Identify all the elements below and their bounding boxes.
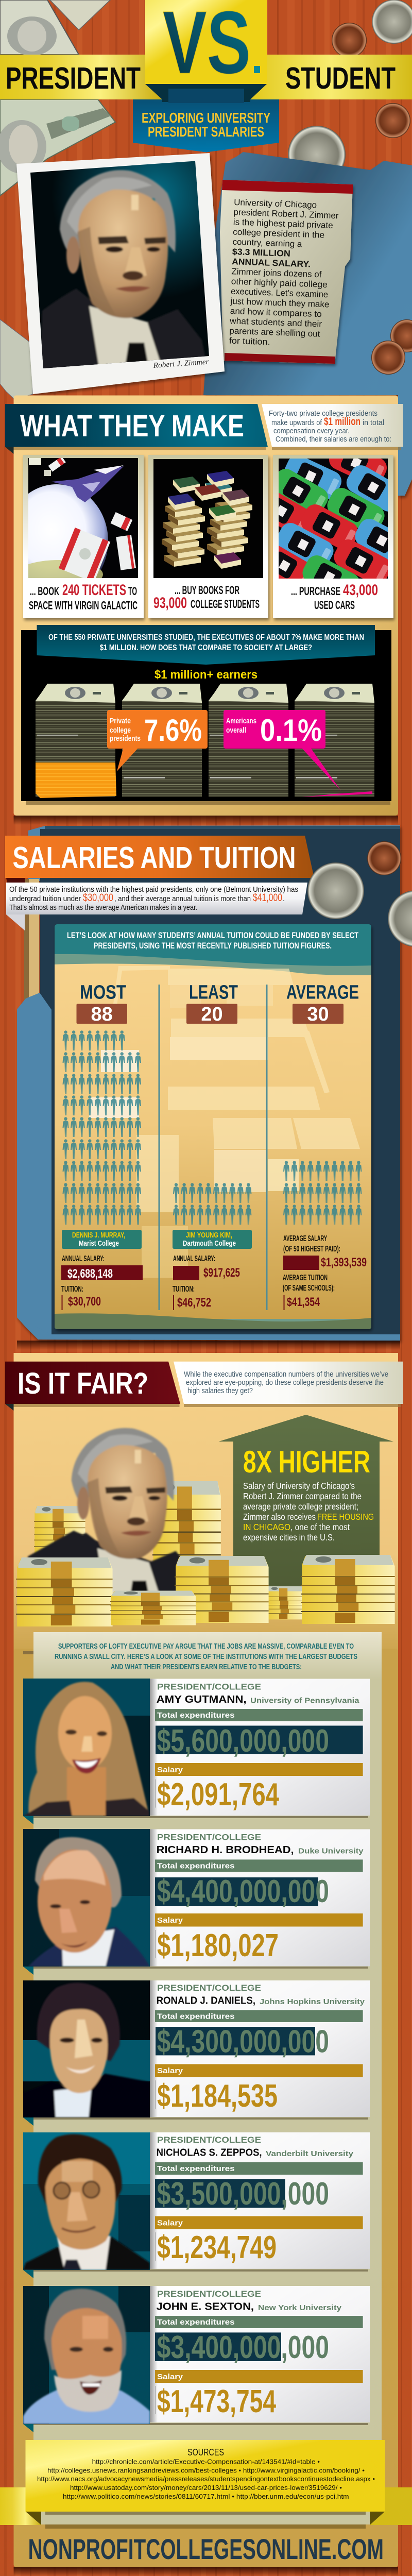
column: average: 30 <box>307 1004 329 1025</box>
bar chart: salary: $1,473,754 <box>157 2384 276 2419</box>
text block: Daniels details: RONALD J. DANIELS, <box>157 1995 255 2006</box>
text block: caption cars <box>291 582 378 612</box>
card: Amy Gutmann <box>23 1679 370 1824</box>
panel: million earners chart <box>21 625 391 805</box>
panel: sources: http://www.nacs.org/advocacynewsmedia/pressreleases/studentspendingontextbookscontinuestodecline.aspx • <box>37 2476 375 2483</box>
text block: caption books: 93,000 <box>153 595 187 612</box>
text block: Daniels details: Johns Hopkins University <box>260 1997 365 2006</box>
text block: Zeppos details: PRESIDENT/COLLEGE <box>157 2135 261 2145</box>
heading: is it fair: IS IT FAIR? <box>18 1367 148 1400</box>
bar chart: total expenditures <box>155 1709 363 1759</box>
icon: rows of used cars <box>279 459 388 579</box>
text block: caption books: COLLEGE STUDENTS <box>191 598 260 611</box>
text block: salaries intro: undergrad tuition under <box>9 894 81 903</box>
heading: is it fair <box>5 1362 180 1411</box>
pictogram: 30 students <box>283 1161 362 1225</box>
divider: column rule one <box>159 985 160 1310</box>
portrait: Zimmer with money <box>28 1428 203 1611</box>
bar chart: total expenditures <box>155 2162 363 2212</box>
callout: americans overall: overall <box>226 726 246 735</box>
bar chart: total expenditures: $4,400,000,000 <box>157 1874 329 1909</box>
text block: forty-two presidents: make upwards of <box>271 418 322 427</box>
text block: intro paragraph: is the highest paid private <box>233 217 333 230</box>
icon: penny right <box>375 103 410 138</box>
text block: forty-two presidents: compensation every year. <box>273 427 350 435</box>
panel: polaroid photo of Robert J. Zimmer: Robert J. Zimmer <box>152 358 209 370</box>
banner: how does that compare <box>37 625 375 665</box>
heading: exploring university president salaries: EXPLORING UNIVERSITY <box>142 110 270 126</box>
icon: penny lower right <box>390 319 412 352</box>
label: Jim Young Kim <box>173 1230 252 1249</box>
heading: salaries and tuition: SALARIES AND TUITION <box>12 841 296 875</box>
column: least: 20 <box>201 1004 223 1025</box>
text block: caption tickets <box>29 582 138 612</box>
text block: supporters argue <box>55 1642 357 1671</box>
icon: spaceship and tickets above planet <box>28 458 138 578</box>
icon: dollar bills lower left <box>0 319 33 399</box>
icon: half dollar by intro <box>307 862 364 919</box>
bar chart: total expenditures <box>155 2316 363 2365</box>
ribbon: sources banner ends <box>0 2487 412 2529</box>
panel: sources: http://www.usatoday.com/story/money/cars/2013/11/13/used-car-prices-lower/3519629/ • <box>70 2484 342 2492</box>
bar chart: total expenditures: $3,400,000,000 <box>157 2330 329 2365</box>
stat: annual salary: $917,625 <box>203 1266 240 1280</box>
icon: half dollar coin middle <box>288 126 346 183</box>
stat: annual salary: ANNUAL SALARY: <box>62 1255 105 1263</box>
portrait: Richard H. Brodhead <box>23 1829 150 1967</box>
text block: let's look at: PRESIDENTS, USING THE MOST RECENTLY PUBLISHED TUITION FIGURES. <box>94 941 332 951</box>
text block: intro paragraph: parents are shelling out <box>229 326 320 339</box>
callout: private college presidents <box>107 710 208 771</box>
text block: caption tickets: TO <box>128 585 137 598</box>
text block: Sexton details: JOHN E. SEXTON, <box>157 2301 254 2312</box>
bar chart: salary: Salary <box>157 2372 183 2381</box>
stat: tuition: $46,752 <box>177 1296 211 1310</box>
bar chart: total expenditures: Total expenditures <box>157 2012 235 2021</box>
stat: annual salary: ANNUAL SALARY: <box>173 1255 215 1263</box>
icon: pile of dollar bills, top left <box>0 0 110 56</box>
pictogram: 88 students <box>63 1030 141 1225</box>
stat: annual salary <box>61 1255 143 1281</box>
text block: Brodhead details: Duke University <box>298 1846 364 1856</box>
icon: pile of dollar bills under ribbon <box>0 99 115 196</box>
stat: average tuition: (OF SAME SCHOOLS): <box>283 1284 335 1293</box>
panel: what they make <box>13 396 398 825</box>
text block: Zimmer comparison <box>243 1481 374 1543</box>
panel: card tickets to space <box>5 455 144 618</box>
bar chart: salary <box>155 1913 363 1963</box>
callout: private college presidents: presidents <box>110 734 141 743</box>
stat: average tuition: $41,354 <box>287 1295 320 1309</box>
text block: forty-two presidents: in total <box>363 418 384 427</box>
stat: annual salary: $2,688,148 <box>67 1267 113 1281</box>
card: John E. Sexton <box>23 2286 370 2432</box>
text block: do they deserve it: explored are eye-popping, do these college presidents deserve the <box>186 1378 384 1387</box>
stat: average salary: AVERAGE SALARY <box>283 1234 327 1243</box>
panel: sources: http://chronicle.com/article/Executive-Compensation-at/143541/#id=table • <box>92 2459 320 2466</box>
panel: card used cars <box>272 455 397 622</box>
column: average: AVERAGE <box>286 982 359 1004</box>
bar chart: total expenditures: Total expenditures <box>157 1711 235 1720</box>
stat: tuition: TUITION: <box>61 1285 83 1294</box>
bar chart: salary: Salary <box>157 1766 183 1774</box>
text block: Sexton details: New York University <box>258 2303 342 2312</box>
text block: salaries intro: $41,000 <box>253 892 282 904</box>
bar chart: salary: Salary <box>157 1916 183 1925</box>
text block: Gutmann details: PRESIDENT/COLLEGE <box>157 1682 261 1692</box>
text block: Sexton details: PRESIDENT/COLLEGE <box>157 2289 261 2299</box>
text block: Brodhead details: RICHARD H. BRODHEAD, <box>157 1844 294 1856</box>
text block: intro paragraph: University of Chicago <box>234 197 317 210</box>
card: Ronald J. Daniels <box>23 1980 370 2126</box>
bar chart: total expenditures <box>155 1859 363 1909</box>
bar chart: total expenditures: $3,500,000,000 <box>157 2176 329 2212</box>
text block: Gutmann details: University of Pennsylvania <box>250 1696 359 1705</box>
text block: Zimmer comparison: Robert J. Zimmer compared to the <box>243 1491 362 1501</box>
text block: intro paragraph: and how it compares to <box>230 306 322 319</box>
bar chart: total expenditures: $4,300,000,000 <box>157 2024 329 2060</box>
panel: folder <box>203 152 412 496</box>
text block: intro paragraph: just how much they make <box>230 296 330 310</box>
text block: intro paragraph: for tuition. <box>229 336 270 347</box>
stat: tuition <box>173 1285 211 1310</box>
bar chart: salary: Salary <box>157 2066 183 2075</box>
text block: salaries intro: That’s almost as much as the average American makes in a year. <box>9 903 197 912</box>
stat: tuition: $30,700 <box>68 1295 101 1309</box>
text block: Zeppos details: NICHOLAS S. ZEPPOS, <box>157 2147 262 2159</box>
arrow: 8x higher callout <box>218 1415 393 1588</box>
text block: intro paragraph: country, earning a <box>232 237 302 249</box>
bar chart: salary: Salary <box>157 2218 183 2228</box>
column: least: LEAST <box>189 982 238 1004</box>
panel: card books <box>148 455 268 618</box>
column: most: 88 <box>91 1004 113 1025</box>
text block: do they deserve it: high salaries they get? <box>187 1386 253 1395</box>
illustration: campus buildings <box>89 966 360 1278</box>
text block: intro paragraph: what students and their <box>229 316 322 329</box>
pictogram: 20 students <box>173 1183 251 1225</box>
portrait: Nicholas S. Zeppos <box>23 2132 150 2270</box>
label: Dennis J. Murray <box>62 1230 142 1249</box>
illustration: back stacks of money <box>34 1481 221 1571</box>
label: Dennis J. Murray: DENNIS J. MURRAY, <box>72 1231 125 1240</box>
chart: money stacks <box>36 684 374 798</box>
text block: supporters argue: AND WHAT THEIR PRESIDENTS EARN RELATIVE TO THE BUDGETS: <box>111 1663 302 1671</box>
text block: salaries intro <box>6 883 307 930</box>
text block: caption cars: USED CARS <box>314 599 355 612</box>
text block: Brodhead details: PRESIDENT/COLLEGE <box>157 1832 261 1842</box>
icon: penny top <box>332 23 367 58</box>
column: most <box>61 982 143 1310</box>
panel: polaroid photo of Robert J. Zimmer <box>16 153 225 394</box>
text block: Gutmann details: AMY GUTMANN, <box>157 1694 247 1705</box>
text block: salaries intro: , and their average annual tuition is more than <box>114 894 251 903</box>
text block: Sexton details <box>157 2289 342 2312</box>
panel: sources: http://colleges.usnews.rankingsandreviews.com/best-colleges • http://www.virgingalactic.com/booking/ • <box>47 2467 365 2475</box>
panel: intro paper <box>220 180 353 364</box>
text block: Gutmann details <box>157 1682 359 1705</box>
callout: private college presidents: 7.6% <box>144 713 202 748</box>
icon: half dollar right edge <box>388 890 412 947</box>
heading: exploring university president salaries <box>142 110 270 140</box>
callout: americans overall: Americans <box>226 717 256 725</box>
callout: private college presidents: college <box>110 726 131 735</box>
icon: stack of textbooks <box>162 471 252 569</box>
stat: average salary <box>283 1234 367 1270</box>
text block: Zimmer comparison: Salary of University of Chicago’s <box>243 1481 355 1491</box>
callout: americans overall <box>224 710 341 791</box>
panel: supporters list <box>23 1632 382 2524</box>
panel: sources <box>26 2440 385 2515</box>
column: most: MOST <box>80 982 126 1004</box>
text block: caption books: ... BUY BOOKS FOR <box>175 584 239 597</box>
stat: tuition: TUITION: <box>173 1285 195 1294</box>
divider: column rule two <box>266 985 268 1310</box>
stat: average salary: (OF 50 HIGHEST PAID): <box>283 1245 340 1253</box>
text block: Zimmer comparison: expensive cities in the U.S. <box>243 1532 335 1543</box>
banner: subtitle ribbon <box>133 84 279 152</box>
column: least <box>173 982 252 1310</box>
text block: do they deserve it: While the executive compensation numbers of the universities we’ve <box>184 1370 388 1379</box>
text block: forty-two presidents: Combined, their salaries are enough to: <box>276 435 391 444</box>
text block: salaries intro: Of the 50 private institutions with the highest paid presidents, only one (Belmont University) has <box>9 885 298 894</box>
text block: intro paragraph: other highly paid college <box>231 277 328 290</box>
label: Dennis J. Murray: Marist College <box>79 1239 119 1248</box>
text block: intro paragraph: executives. Let’s examine <box>231 286 328 299</box>
ribbon: president student <box>0 55 412 99</box>
text block: Zimmer comparison: average private college president; <box>243 1501 358 1512</box>
panel: sources: http://www.politico.com/news/stories/0811/60717.html • http://bber.unm.edu/econ/us-pci.htm <box>63 2493 349 2500</box>
panel: is it fair <box>13 1353 398 2576</box>
bar chart: salary <box>155 2216 363 2265</box>
card: Nicholas S. Zeppos <box>23 2132 370 2278</box>
bar chart: salary <box>155 1763 363 1812</box>
panel: salaries and tuition folder <box>17 825 400 1350</box>
title: PRESIDENT: PRESIDENT <box>6 61 141 95</box>
text block: caption tickets: SPACE WITH VIRGIN GALACTIC <box>29 599 138 612</box>
bar chart: salary: $1,234,749 <box>157 2230 277 2265</box>
text block: forty-two presidents: Forty-two private college presidents <box>269 409 377 418</box>
text block: let's look at <box>67 930 358 951</box>
heading: what they make <box>5 404 268 454</box>
bar chart: total expenditures: Total expenditures <box>157 2164 235 2173</box>
icon: half dollar coin top right <box>372 0 412 44</box>
card: Richard H. Brodhead <box>23 1829 370 1975</box>
heading: what they make: WHAT THEY MAKE <box>20 409 244 443</box>
heading: exploring university president salaries: PRESIDENT SALARIES <box>148 124 264 140</box>
bar chart: salary <box>155 2370 363 2419</box>
portrait: John E. Sexton <box>23 2286 150 2424</box>
arrow: 8x higher callout: 8X HIGHER <box>243 1445 370 1479</box>
callout: private college presidents: Private <box>110 717 131 725</box>
text block: Zimmer comparison: , one of the most <box>290 1522 350 1532</box>
portrait: Ronald J. Daniels <box>23 1980 150 2117</box>
text block: caption tickets: ... BOOK <box>30 585 59 598</box>
text block: Zimmer comparison: Zimmer also receives <box>243 1512 316 1522</box>
icon: penny section two <box>367 841 401 875</box>
portrait: Amy Gutmann <box>23 1679 150 1816</box>
bar chart: salary: $1,180,027 <box>157 1928 279 1963</box>
label: Jim Young Kim: Dartmouth College <box>183 1239 236 1248</box>
text block: Zeppos details: Vanderbilt University <box>266 2149 354 2158</box>
stat: average tuition: AVERAGE TUITION <box>283 1274 328 1282</box>
stat: annual salary <box>173 1255 240 1280</box>
label: Jim Young Kim: JIM YOUNG KIM, <box>186 1231 232 1240</box>
bar chart: total expenditures: $5,600,000,000 <box>157 1723 329 1759</box>
column: average <box>283 982 367 1310</box>
stat: tuition <box>61 1285 101 1310</box>
text block: forty-two presidents: $1 million <box>324 416 360 428</box>
text block: intro paragraph: president Robert J. Zimmer <box>233 207 339 221</box>
text block: intro paragraph: $3.3 MILLION <box>232 247 290 259</box>
text block: caption books <box>153 584 260 612</box>
text block: salaries intro: . <box>283 894 285 903</box>
text block: intro paragraph: ANNUAL SALARY. <box>232 257 311 269</box>
text block: Daniels details: PRESIDENT/COLLEGE <box>157 1983 261 1993</box>
panel: sources: SOURCES <box>187 2447 224 2458</box>
icon: penny bottom of folder <box>371 341 405 375</box>
text block: do they deserve it <box>174 1362 403 1407</box>
text block: caption cars: 43,000 <box>343 582 378 599</box>
heading: million earners: $1 million+ earners <box>154 668 258 681</box>
text block: intro paragraph: college president in the <box>233 227 324 240</box>
text block: Zimmer comparison: FREE HOUSING <box>317 1512 374 1522</box>
text block: intro paragraph: Zimmer joins dozens of <box>231 266 322 279</box>
bar chart: salary <box>155 2064 363 2114</box>
bar chart: total expenditures: Total expenditures <box>157 2318 235 2327</box>
bar chart: salary: $2,091,764 <box>157 1777 279 1812</box>
text block: intro paragraph <box>228 197 339 349</box>
text block: Brodhead details <box>157 1832 364 1856</box>
bar chart: salary: $1,184,535 <box>157 2078 278 2114</box>
stat: average tuition <box>283 1274 335 1310</box>
text block: salaries intro: $30,000 <box>83 892 113 904</box>
text block: forty-two presidents <box>262 404 403 450</box>
banner: how does that compare: $1 MILLION. HOW DOES THAT COMPARE TO SOCIETY AT LARGE? <box>100 643 312 652</box>
stat: average salary: $1,393,539 <box>321 1256 367 1269</box>
text block: Zeppos details <box>157 2135 354 2159</box>
bar chart: total expenditures: Total expenditures <box>157 1862 235 1870</box>
text block: caption tickets: 240 TICKETS <box>62 582 126 599</box>
bar chart: total expenditures <box>155 2010 363 2060</box>
text block: Zimmer comparison: IN CHICAGO <box>243 1522 290 1532</box>
callout: americans overall: 0.1% <box>260 713 322 748</box>
illustration: front stacks of money <box>16 1555 395 1626</box>
text block: caption cars: ... PURCHASE <box>291 585 340 598</box>
heading: salaries and tuition <box>5 836 314 883</box>
panel: tuition comparison <box>55 924 371 1329</box>
text block: Daniels details <box>157 1983 365 2006</box>
